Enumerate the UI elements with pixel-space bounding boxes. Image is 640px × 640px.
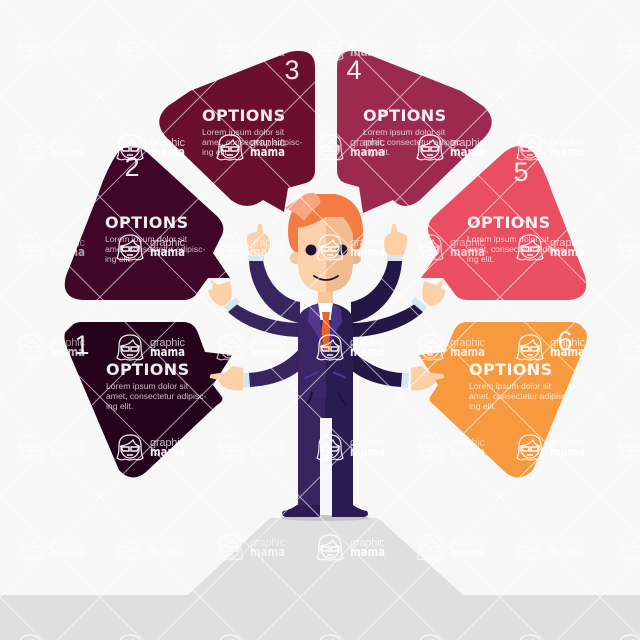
text block 1: Lorem ipsum dolor sit [106, 381, 189, 391]
text block 5: Lorem ipsum dolor sit [467, 234, 550, 244]
watermark logos: graphic [350, 237, 386, 249]
watermark logos: mama [250, 445, 285, 459]
shirt collar [318, 303, 333, 320]
speech bubble 5 [421, 146, 586, 300]
watermark logos: graphic [350, 37, 386, 49]
speech bubble 1 [64, 322, 232, 478]
text block 2: Lorem ipsum dolor sit [105, 234, 188, 244]
face [298, 217, 326, 292]
watermark logos: graphic [250, 137, 286, 149]
watermark logos: graphic [350, 137, 386, 149]
hair highlight [285, 193, 320, 221]
eyes [306, 244, 316, 256]
watermark logos: graphic [550, 437, 586, 449]
watermark logos: mama [50, 245, 85, 259]
watermark logos: mama [150, 245, 185, 259]
watermark logos: mama [50, 45, 85, 59]
watermark logos: mama [550, 545, 585, 559]
watermark logos: mama [250, 345, 285, 359]
panel: option 1 [64, 322, 232, 478]
tie [320, 312, 332, 352]
watermark logos: mama [450, 145, 485, 159]
watermark logos: graphic [250, 537, 286, 549]
watermark logos: mama [50, 345, 85, 359]
watermark logos: graphic [550, 237, 586, 249]
watermark logos: mama [150, 445, 185, 459]
watermark logos: graphic [350, 437, 386, 449]
hands right [384, 224, 446, 390]
watermark logos: graphic [350, 537, 386, 549]
watermark logos: graphic [150, 537, 186, 549]
panel: option 6 [419, 322, 587, 478]
watermark logos: graphic [450, 237, 486, 249]
jacket right [326, 303, 353, 398]
watermark logos: graphic [50, 37, 86, 49]
watermark logos: mama [550, 345, 585, 359]
watermark logos: mama [450, 345, 485, 359]
watermark logos: graphic [250, 237, 286, 249]
heading 3: OPTIONS [202, 106, 286, 125]
arms left [228, 260, 300, 387]
number 4: 4 [346, 55, 362, 85]
lapel left [308, 303, 323, 346]
speech bubble 3 [159, 51, 315, 212]
watermark logos: mama [550, 45, 585, 59]
speech bubble 4 [337, 51, 492, 213]
trouser pockets [306, 392, 347, 405]
text block 1: amet, consectetur adipisc- [106, 391, 206, 401]
watermark logos: graphic [50, 137, 86, 149]
shoe right [332, 505, 368, 517]
text block 4: Lorem ipsum dolor sit [363, 127, 446, 137]
watermark logos: mama [250, 245, 285, 259]
watermark logos: graphic [450, 137, 486, 149]
ground with pyramid [0, 518, 640, 640]
panel: option 2 [65, 146, 230, 300]
watermark logos: graphic [550, 337, 586, 349]
heading 2: OPTIONS [105, 213, 189, 232]
watermark logos: mama [350, 545, 385, 559]
text block 3: ing elit. [202, 147, 229, 157]
number 2: 2 [124, 152, 140, 182]
number 6: 6 [557, 326, 573, 356]
watermark logos: graphic [50, 337, 86, 349]
watermark logos: graphic [150, 237, 186, 249]
watermark logos: graphic [450, 537, 486, 549]
speech bubble 2 [65, 146, 230, 300]
shirt cuffs right [387, 255, 427, 388]
watermark logos: graphic [450, 437, 486, 449]
shadow under feet [281, 515, 369, 521]
text block 2: ing elit. [105, 254, 132, 264]
text block 4: ing elit. [363, 147, 390, 157]
watermark logos: mama [550, 245, 585, 259]
text block 1: ing elit. [106, 401, 133, 411]
watermark logos: mama [50, 545, 85, 559]
text block 2: amet, consectetur adipisc- [105, 244, 205, 254]
watermark logos: graphic [250, 337, 286, 349]
smile [314, 276, 338, 280]
watermark logos: mama [250, 145, 285, 159]
watermark logos: mama [50, 445, 85, 459]
watermark logos: mama [350, 145, 385, 159]
text block 5: ing elit. [467, 254, 494, 264]
heading 4: OPTIONS [363, 106, 447, 125]
ears [290, 252, 302, 264]
watermark logos: mama [350, 245, 385, 259]
heading 1: OPTIONS [106, 360, 190, 379]
text block 6: ing elit. [469, 401, 496, 411]
watermark logos: mama [150, 545, 185, 559]
text block 3: Lorem ipsum dolor sit [202, 127, 285, 137]
jacket pockets [305, 372, 346, 378]
number 5: 5 [513, 157, 529, 187]
watermark logos: mama [350, 445, 385, 459]
heading 5: OPTIONS [467, 213, 551, 232]
watermark logos: graphic [50, 537, 86, 549]
watermark logos: graphic [150, 37, 186, 49]
watermark logos: graphic [150, 337, 186, 349]
watermark logos: graphic [50, 437, 86, 449]
watermark logos: mama [150, 45, 185, 59]
panel: option 3 [159, 51, 315, 212]
text block 3: amet, consectetur adipisc- [202, 137, 302, 147]
watermark logos: mama [350, 45, 385, 59]
text block 5: amet, consectetur adipisc- [467, 244, 567, 254]
watermark logos: graphic [450, 37, 486, 49]
watermark logos: mama [450, 445, 485, 459]
watermark logos: mama [250, 45, 285, 59]
watermark logos: mama [450, 45, 485, 59]
watermark logos: graphic [450, 337, 486, 349]
legs right [325, 385, 353, 510]
speech bubble 6 [419, 322, 587, 478]
watermark logos: mama [50, 145, 85, 159]
watermark logos: mama [450, 245, 485, 259]
watermark logos: graphic [50, 237, 86, 249]
neck [318, 285, 333, 312]
watermark logos: graphic [150, 137, 186, 149]
watermark logos: graphic [350, 337, 386, 349]
legs left [298, 385, 325, 510]
number 3: 3 [284, 55, 300, 85]
number 1: 1 [74, 330, 90, 360]
heading 6: OPTIONS [469, 360, 553, 379]
watermark logos: graphic [550, 37, 586, 49]
watermark logos: graphic [150, 437, 186, 449]
businessman with six arms [208, 193, 446, 521]
watermark logos: mama [150, 345, 185, 359]
arms right [351, 260, 423, 387]
lapel right [329, 303, 342, 346]
watermark logos: mama [150, 145, 185, 159]
head [285, 193, 363, 292]
watermark logos: mama [350, 345, 385, 359]
shirt cuffs left [224, 255, 264, 388]
watermark logos: mama [550, 445, 585, 459]
watermark logos: graphic [250, 437, 286, 449]
jacket left [298, 303, 326, 398]
watermark logos: graphic [250, 37, 286, 49]
text block 6: Lorem ipsum dolor sit [469, 381, 552, 391]
watermark logos: mama [250, 545, 285, 559]
shoe left [282, 505, 320, 517]
hands left [208, 224, 270, 390]
watermark logos: graphic [550, 537, 586, 549]
text block 6: amet, consectetur adipisc- [469, 391, 569, 401]
hair back [288, 194, 363, 254]
watermark logos: graphic [550, 137, 586, 149]
panel: option 5 [421, 146, 586, 300]
text block 4: amet, consectetur adipisc- [363, 137, 463, 147]
watermark logos: mama [550, 145, 585, 159]
panel: option 4 [337, 51, 492, 213]
watermark logos: mama [450, 545, 485, 559]
